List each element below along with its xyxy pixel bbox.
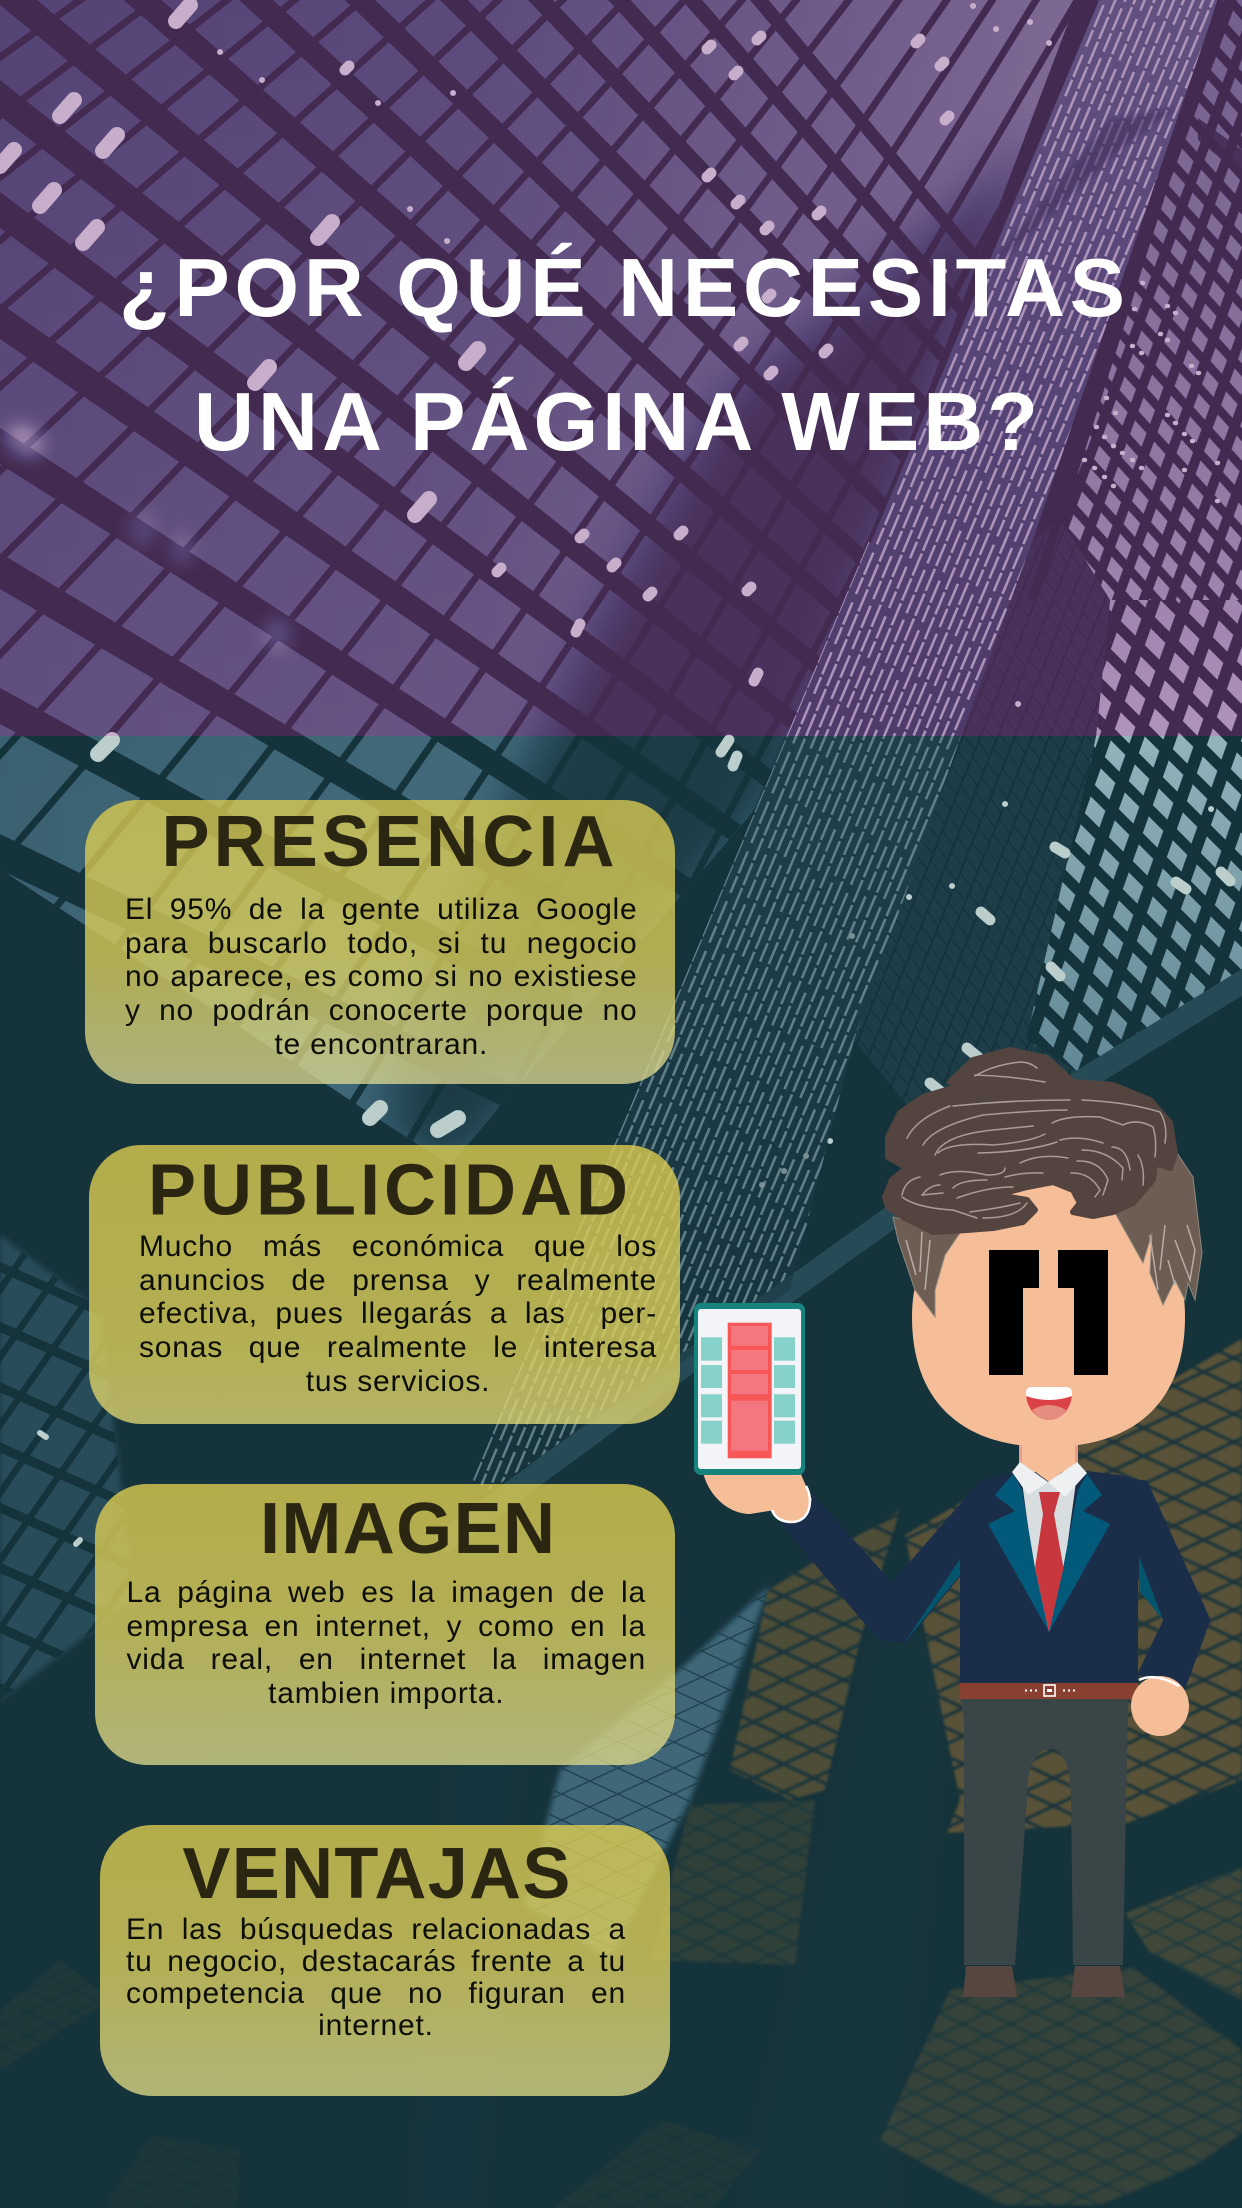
tuft highlights: [906, 1225, 1195, 1290]
resting hand: [1131, 1676, 1189, 1736]
text: imagen: [126, 1576, 646, 1710]
text: publicidad: sonas que realmente le interesa: [139, 1331, 657, 1364]
neck: [1019, 1440, 1078, 1482]
panel: publicidad: [89, 1144, 680, 1424]
head: [912, 1183, 1185, 1447]
text: ventajas: internet.: [318, 2009, 434, 2042]
shoes: [963, 1966, 1125, 1997]
hair highlights: [902, 1062, 1166, 1218]
text: ventajas: competencia que no figuran en: [126, 1977, 626, 2010]
text: imagen: empresa en internet, y como en la: [126, 1610, 646, 1643]
black bars over the eyes: [989, 1250, 1108, 1375]
text: publicidad: Mucho más económica que los: [139, 1230, 657, 1263]
hair side tufts: [893, 1150, 1202, 1317]
heading: publicidad: PUBLICIDAD: [148, 1150, 628, 1230]
belt: [960, 1683, 1138, 1699]
panel: presencia: [84, 800, 675, 1084]
mouth: [1026, 1387, 1072, 1420]
hair top: [885, 1050, 1175, 1232]
text: presencia: te encontraran.: [274, 1028, 488, 1061]
text: imagen: tambien importa.: [268, 1677, 504, 1710]
text: ventajas: En las búsquedas relacionadas a: [126, 1913, 626, 1946]
panel: ventajas: [100, 1825, 670, 2096]
tie: [1035, 1492, 1064, 1632]
heading: presencia: PRESENCIA: [161, 802, 614, 882]
palm: [703, 1472, 812, 1514]
text: publicidad: [139, 1230, 657, 1398]
text: presencia: no aparece, es como si no existiese: [125, 960, 638, 993]
resting arm sleeve: [1120, 1480, 1209, 1690]
text: imagen: vida real, en internet la imagen: [126, 1643, 646, 1676]
text: presencia: para buscarlo todo, si tu negocio: [125, 927, 638, 960]
lapels: [988, 1474, 1110, 1632]
illustration: businessman holding a phone: [694, 1047, 1210, 1997]
title: UNA PÁGINA WEB?: [194, 375, 1038, 468]
heading: ventajas: VENTAJAS: [182, 1834, 570, 1914]
trousers: [960, 1699, 1128, 1965]
text: presencia: y no podrán conocerte porque no: [125, 994, 638, 1027]
title: ¿POR QUÉ NECESITAS: [119, 241, 1125, 334]
title: [119, 241, 1125, 468]
text: ventajas: tu negocio, destacarás frente a tu: [126, 1945, 626, 1978]
text: imagen: La página web es la imagen de la: [126, 1576, 646, 1609]
panel: imagen: [95, 1484, 675, 1765]
text: presencia: [125, 893, 638, 1061]
shirt: [1022, 1482, 1076, 1632]
heading: imagen: IMAGEN: [260, 1489, 555, 1569]
thumb: [772, 1478, 810, 1522]
raised arm sleeve: [782, 1479, 990, 1642]
text: publicidad: efectiva, pues llegarás a las per-: [139, 1297, 657, 1330]
shirt collar: [1012, 1462, 1087, 1497]
text: presencia: El 95% de la gente utiliza Google: [125, 893, 638, 926]
text: publicidad: tus servicios.: [306, 1365, 490, 1398]
text: publicidad: anuncios de prensa y realmente: [139, 1264, 657, 1297]
text: ventajas: [126, 1913, 626, 2042]
jacket torso: [960, 1470, 1146, 1683]
phone: [694, 1303, 805, 1475]
